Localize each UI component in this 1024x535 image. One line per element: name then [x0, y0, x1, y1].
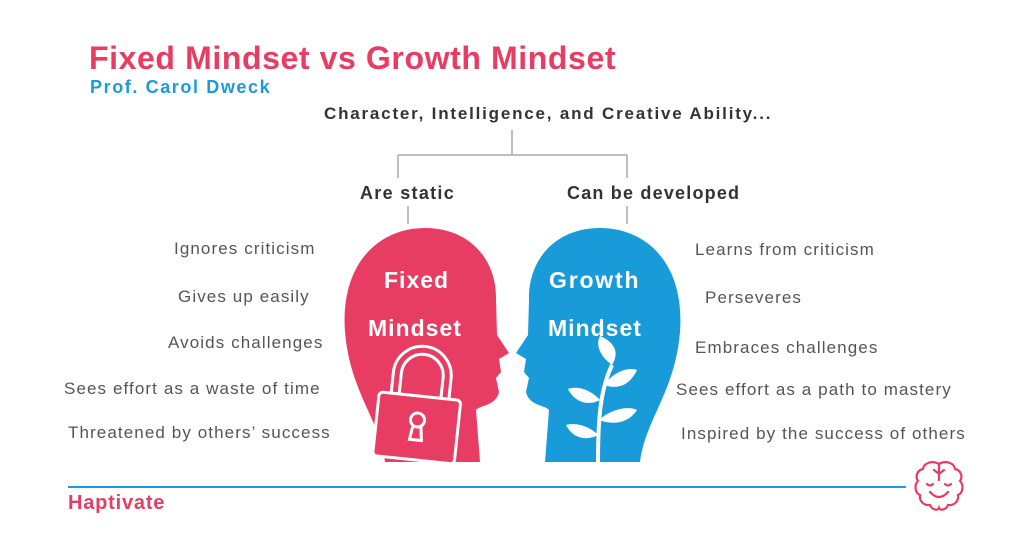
list: fixed traits: Gives up easily	[178, 287, 310, 306]
heading: traits: Character, Intelligence, and Creative Ability...	[324, 104, 772, 123]
growth head	[516, 228, 680, 462]
icon: plant	[566, 336, 637, 462]
list: fixed traits	[64, 239, 331, 442]
footer line	[68, 486, 906, 488]
list: growth traits: Sees effort as a path to mastery	[676, 380, 952, 399]
fixed head	[345, 228, 509, 464]
icon: brain	[914, 461, 964, 511]
list: fixed traits: Avoids challenges	[168, 333, 323, 352]
list: growth traits: Perseveres	[705, 288, 802, 307]
list: growth traits: Learns from criticism	[695, 240, 875, 259]
title: Fixed Mindset vs Growth Mindset	[89, 40, 616, 76]
head text: fixed mindset: Mindset	[368, 315, 462, 341]
icon: padlock	[373, 346, 466, 464]
label: can be developed: Can be developed	[567, 183, 740, 203]
list: growth traits	[676, 240, 966, 443]
list: fixed traits: Threatened by others’ success	[68, 423, 331, 442]
list: growth traits: Embraces challenges	[695, 338, 878, 357]
subtitle: Prof. Carol Dweck	[90, 77, 271, 97]
head text: growth: Growth	[549, 267, 640, 293]
list: fixed traits: Sees effort as a waste of time	[64, 379, 321, 398]
head text: fixed: Fixed	[384, 267, 449, 293]
list: fixed traits: Ignores criticism	[174, 239, 316, 258]
list: growth traits: Inspired by the success of others	[681, 424, 966, 443]
label: are static: Are static	[360, 183, 455, 203]
head text: growth mindset: Mindset	[548, 315, 642, 341]
logo: Haptivate: Haptivate	[68, 492, 165, 514]
